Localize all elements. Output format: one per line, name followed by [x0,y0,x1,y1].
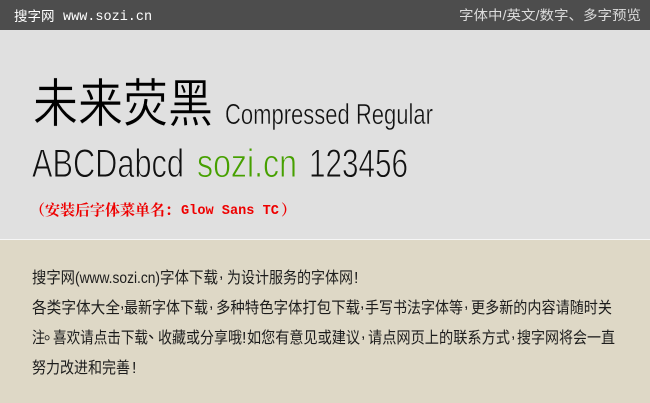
font style label: Compressed Regular [225,99,433,131]
latin sample: ABCDabcd [32,142,184,186]
site name: 搜字网 [14,9,54,24]
description line 4: 努力改进和完善 [32,359,130,377]
font name heading: 未来荧黑 [33,76,213,134]
description line 2: 多种特色字体打包下载 [216,299,360,317]
description line 3: 请点网页上的联系方式 [368,329,510,347]
description line 3: ! [242,330,246,347]
description line 3: 如您有意见或建议 [247,328,360,347]
description line 1: ! [354,270,358,287]
site url: www.sozi.cn [63,10,152,25]
description line 3: 搜字网将会一直 [517,329,615,347]
description line 2: , [464,295,468,312]
description line 1: (www.sozi.cn) [75,270,160,287]
description line 3: , [361,325,365,342]
description line 3: 、 [148,325,164,342]
panel: site description [0,240,650,403]
header description: 字体中/英文/数字、多字预览 [459,7,641,23]
description line 2: 更多新的内容请随时关 [471,299,612,317]
installed font menu name: ） [281,199,296,220]
green url sample: sozi.cn [197,142,297,186]
description line 1: 为设计服务的字体网 [227,269,353,287]
installed font menu name: Glow Sans TC [181,204,279,219]
description line 2: 最新字体下载 [124,299,208,317]
description line 4: ! [132,360,136,377]
number sample: 123456 [309,142,408,186]
divider line [0,239,650,240]
description line 2 [32,295,612,317]
panel: font preview [0,30,650,239]
installed font menu name [30,199,296,220]
description line 2: 各类字体大全 [32,299,120,317]
description line 3 [32,325,615,347]
description line 3: , [511,325,515,342]
description line 1: , [219,265,223,282]
description line 3: 收藏或分享哦 [158,329,242,347]
installed font menu name: （安装后字体菜单名： [30,199,180,220]
description line 3: 。 [44,326,60,343]
panel: top header bar [0,0,650,30]
description line 2: , [209,295,213,312]
description line 2: 手写书法字体等 [365,299,463,317]
description line 1 [32,265,358,287]
description line 2: , [120,295,124,312]
description line 3: 注 [32,329,45,347]
description line 1: 字体下载 [160,269,218,287]
description line 3: 喜欢请点击下载 [53,329,148,347]
description line 1: 搜字网 [32,269,75,287]
description line 2: , [360,295,364,312]
